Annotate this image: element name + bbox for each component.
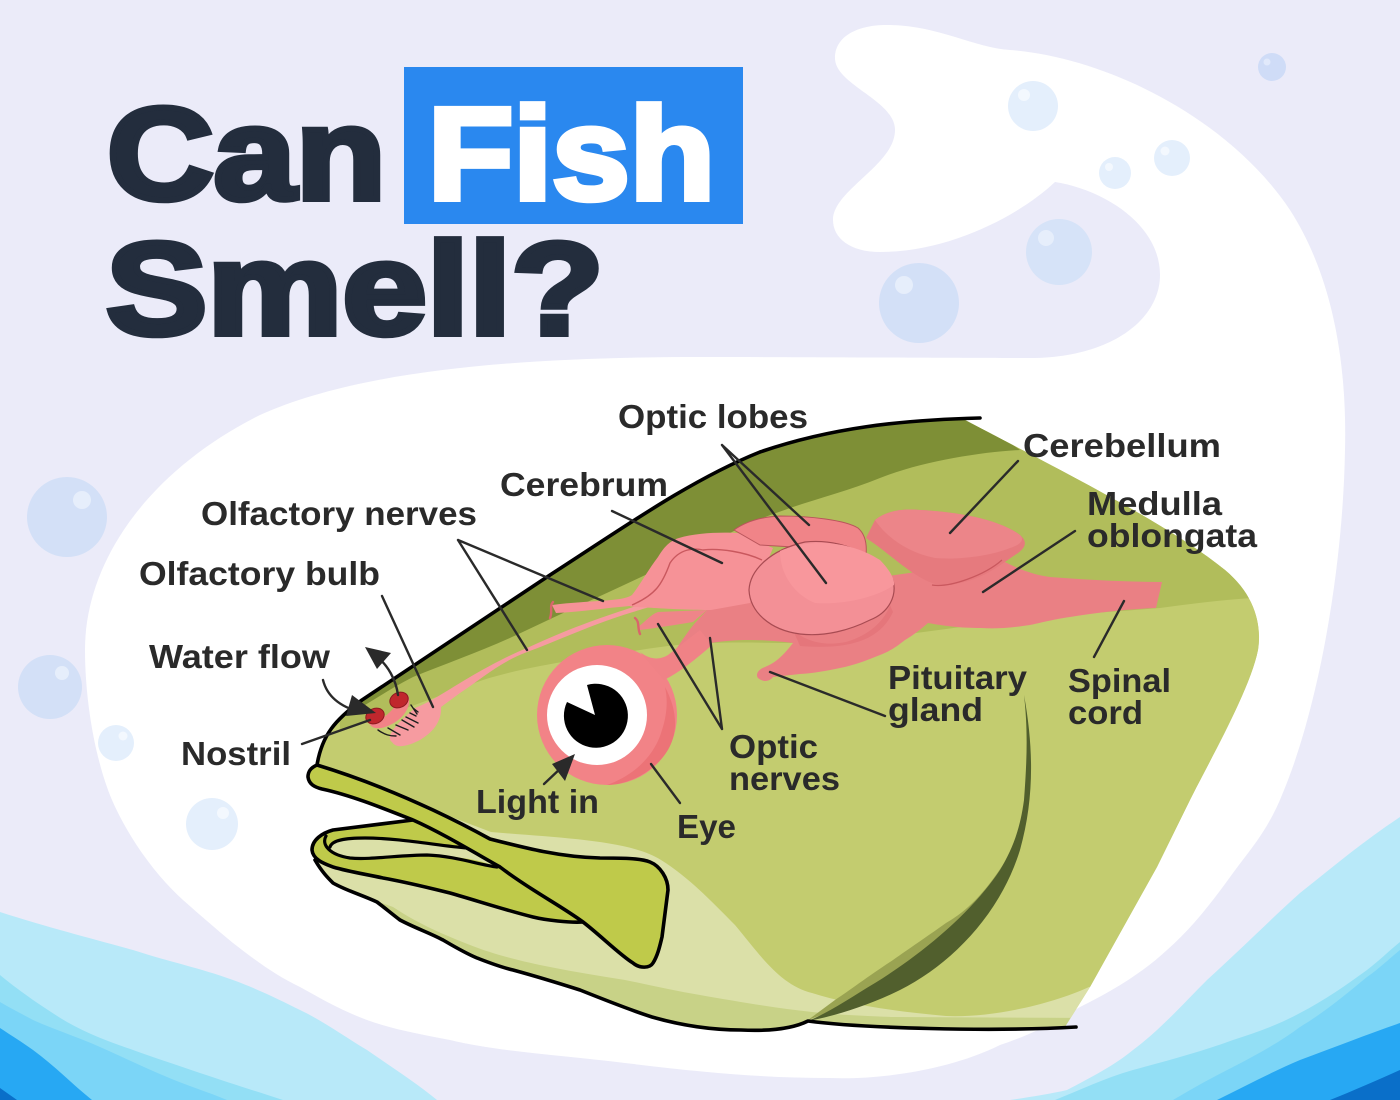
fish head illustration [306,416,1260,1032]
optic nerve tip [635,618,640,634]
leader lines [302,445,1124,803]
chin shade [380,420,1259,1028]
label: pituitary gland [888,659,1028,728]
label: water flow: Water flow [149,638,330,675]
label: cerebrum: Cerebrum [500,466,668,503]
title: Smell? [106,215,604,362]
title: Can [107,80,386,227]
arrow: water flow in [323,680,376,716]
title [106,67,743,362]
spinal cord, medulla and optic tract [662,560,1162,681]
label: optic nerves: Optic [729,728,818,765]
brain [390,509,1162,746]
arrow: light in [544,754,575,784]
waves: bottom left [0,912,437,1100]
upper jaw [308,765,668,967]
label: olfactory nerves: Olfactory nerves [201,495,477,532]
label: light in: Light in [476,783,599,820]
eye [537,630,712,785]
cerebellum [866,509,1025,585]
eye socket [537,645,677,785]
label: olfactory bulb: Olfactory bulb [139,555,380,592]
medulla undershadow [793,605,893,647]
main optic lobe [749,541,894,635]
nostrils [363,689,418,736]
title highlight box [404,67,743,224]
label: eye: Eye [677,808,736,845]
upper optic branch [638,610,707,630]
label: optic nerves: nerves [729,760,840,797]
dark crown band [362,420,1020,705]
label: medulla oblongata: Medulla [1087,485,1223,522]
upper head band [330,400,1270,730]
olfactory nerve tip [550,602,553,618]
lower jaw [312,820,583,922]
waves: bottom right [1010,817,1400,1100]
labels [139,398,1258,845]
gill cover edge, dark [808,695,1031,1021]
head outline [317,418,980,765]
label: optic lobes: Optic lobes [618,398,808,435]
fish body layers [318,420,1260,1028]
gill cover edge, light [809,864,1004,1020]
mouth interior [330,838,497,867]
title: Fish [428,80,715,227]
label: spinal cord [1068,662,1171,731]
label: medulla oblongata [1087,485,1258,554]
connection to optic nerve [640,630,712,680]
label: spinal cord: cord [1068,694,1143,731]
label: medulla oblongata: oblongata [1087,517,1258,554]
rear optic lobe [734,516,866,555]
label: cerebellum: Cerebellum [1023,427,1221,464]
arrow: water flow out [365,647,398,695]
head main colour [290,400,1300,1016]
eye white [547,665,647,765]
pupil [564,684,628,748]
label: optic nerves [729,728,840,797]
throat outline [315,860,1076,1030]
gill pale area [318,818,1100,1018]
label: nostril: Nostril [181,735,291,772]
olfactory tract [390,598,670,746]
label: pituitary gland: gland [888,691,983,728]
label: spinal cord: Spinal [1068,662,1171,699]
label: pituitary gland: Pituitary [888,659,1028,696]
bubbles [18,53,1286,850]
cerebrum [552,533,773,613]
